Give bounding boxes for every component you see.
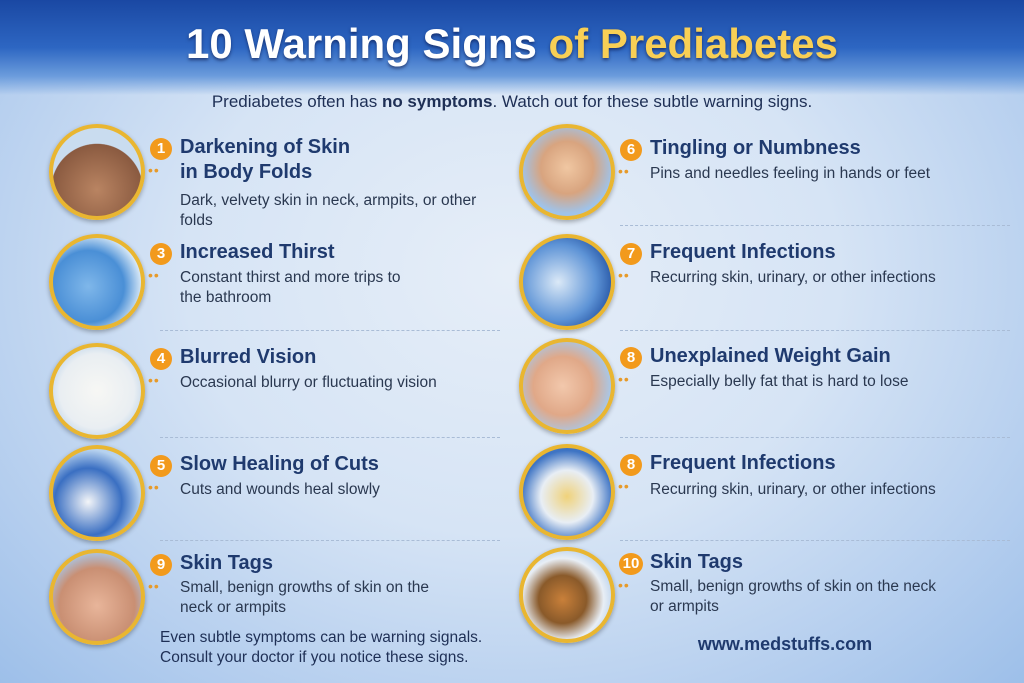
- item 8b: 8: [627, 456, 635, 473]
- website: www.medstuffs.com: [698, 634, 872, 654]
- item 7: [618, 241, 936, 286]
- item 8b: ••: [618, 478, 630, 494]
- item 10: Skin Tags: [650, 551, 743, 573]
- icon: doctor: [49, 445, 145, 541]
- icon: man rubbing eyes: [519, 124, 615, 220]
- item 8: Especially belly fat that is hard to lose: [650, 373, 908, 390]
- item 5: Cuts and wounds heal slowly: [180, 481, 380, 498]
- item 6: Tingling or Numbness: [650, 137, 861, 159]
- item 5: ••: [148, 479, 160, 495]
- item 9: Skin Tags: [180, 552, 273, 574]
- icon: neck skin: [49, 124, 145, 220]
- icon: burger: [519, 547, 615, 643]
- item 3: Increased Thirst: [180, 241, 335, 263]
- item 8b: Frequent Infections: [650, 452, 836, 474]
- item 8: [618, 345, 908, 390]
- icon: eye chart: [49, 343, 145, 439]
- item 6: 6: [627, 141, 635, 158]
- item 7: ••: [618, 267, 630, 283]
- item 9: [148, 552, 429, 616]
- icon: infections: [519, 234, 615, 330]
- item 1: Dark, velvety skin in neck, armpits, or other folds: [180, 192, 476, 229]
- item 8: 8: [627, 349, 635, 366]
- item 6: ••: [618, 163, 630, 179]
- item 9: Small, benign growths of skin on the neck or armpits: [180, 579, 429, 616]
- title banner: [0, 0, 1024, 95]
- item 4: [148, 346, 437, 391]
- item 5: 5: [157, 457, 165, 474]
- item 8: Unexplained Weight Gain: [650, 345, 891, 367]
- title: 10 Warning Signs of Prediabetes: [186, 20, 838, 67]
- item 1: ••: [148, 162, 160, 178]
- item 3: 3: [157, 245, 165, 262]
- item 1: [148, 136, 476, 229]
- icon: water glass: [49, 234, 145, 330]
- icon: skin tags: [49, 549, 145, 645]
- item 5: [148, 453, 380, 498]
- item 7: Recurring skin, urinary, or other infections: [650, 269, 936, 286]
- item 8: ••: [618, 371, 630, 387]
- item 4: ••: [148, 372, 160, 388]
- item 10: 10: [623, 555, 639, 572]
- item 4: 4: [157, 350, 165, 367]
- item 10: ••: [618, 577, 630, 593]
- item 10: or armpits: [650, 598, 719, 615]
- item 3: Constant thirst and more trips to the bathroom: [180, 269, 401, 306]
- item 1: in Body Folds: [180, 161, 312, 183]
- item 1: Darkening of Skin: [180, 136, 350, 158]
- item 3: [148, 241, 401, 306]
- item 9: 9: [157, 556, 165, 573]
- icon: foot: [519, 338, 615, 434]
- item 8b: Recurring skin, urinary, or other infections: [650, 481, 936, 498]
- item 7: 7: [627, 245, 635, 262]
- item 6: Pins and needles feeling in hands or feet: [650, 165, 930, 182]
- item 3: ••: [148, 267, 160, 283]
- item 6: [618, 137, 930, 182]
- item 4: Blurred Vision: [180, 346, 316, 368]
- item 9: ••: [148, 578, 160, 594]
- item 5: Slow Healing of Cuts: [180, 453, 379, 475]
- item 4: Occasional blurry or fluctuating vision: [180, 374, 437, 391]
- footer note: Even subtle symptoms can be warning signals. Consult your doctor if you notice these signs.: [160, 629, 482, 666]
- item 10: Small, benign growths of skin on the neck: [650, 578, 936, 595]
- icon: measuring waist: [519, 444, 615, 540]
- subtitle: Prediabetes often has no symptoms. Watch out for these subtle warning signs.: [212, 92, 812, 111]
- item 1: 1: [157, 140, 165, 157]
- item 10: [618, 551, 936, 615]
- item 8b: [618, 452, 936, 498]
- item 7: Frequent Infections: [650, 241, 836, 263]
